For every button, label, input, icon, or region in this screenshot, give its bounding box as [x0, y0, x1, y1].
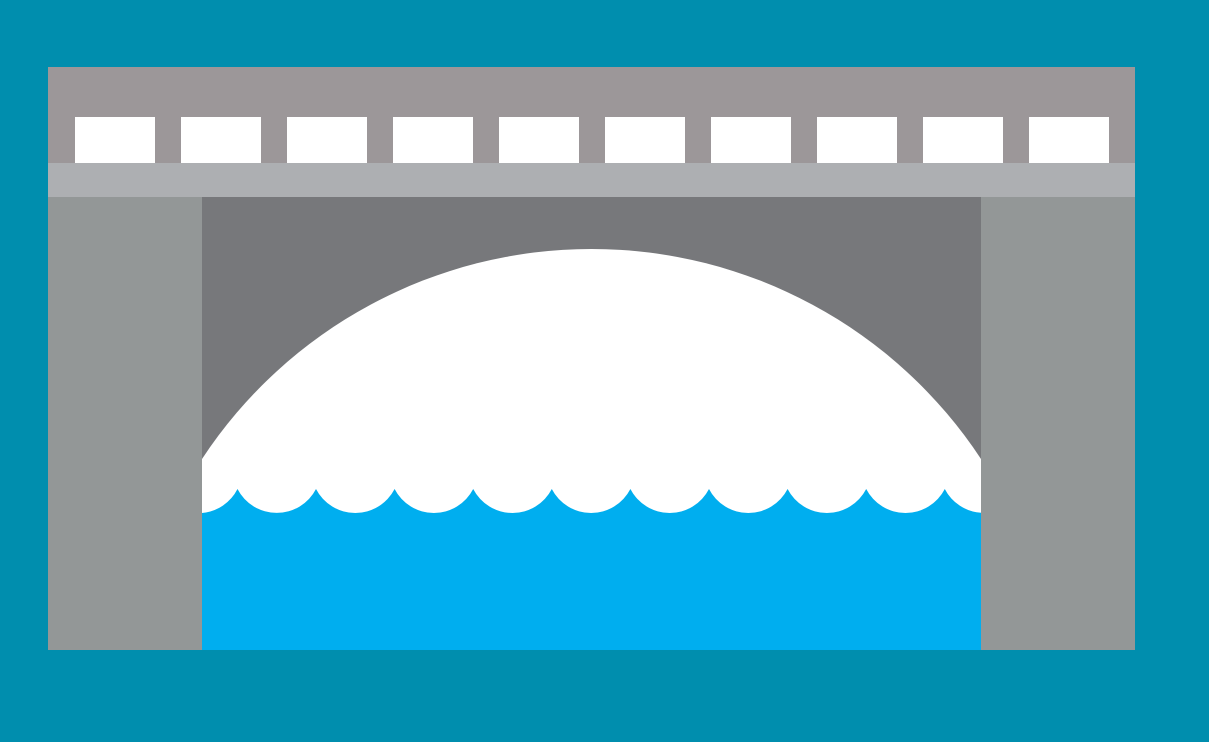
water with scalloped waves [202, 489, 981, 650]
left pier [48, 197, 202, 650]
arch spandrel [202, 197, 981, 497]
arch opening [202, 249, 981, 520]
right pier [981, 197, 1135, 650]
bridge parapet with railing openings [48, 67, 1135, 163]
road deck band [48, 163, 1135, 197]
